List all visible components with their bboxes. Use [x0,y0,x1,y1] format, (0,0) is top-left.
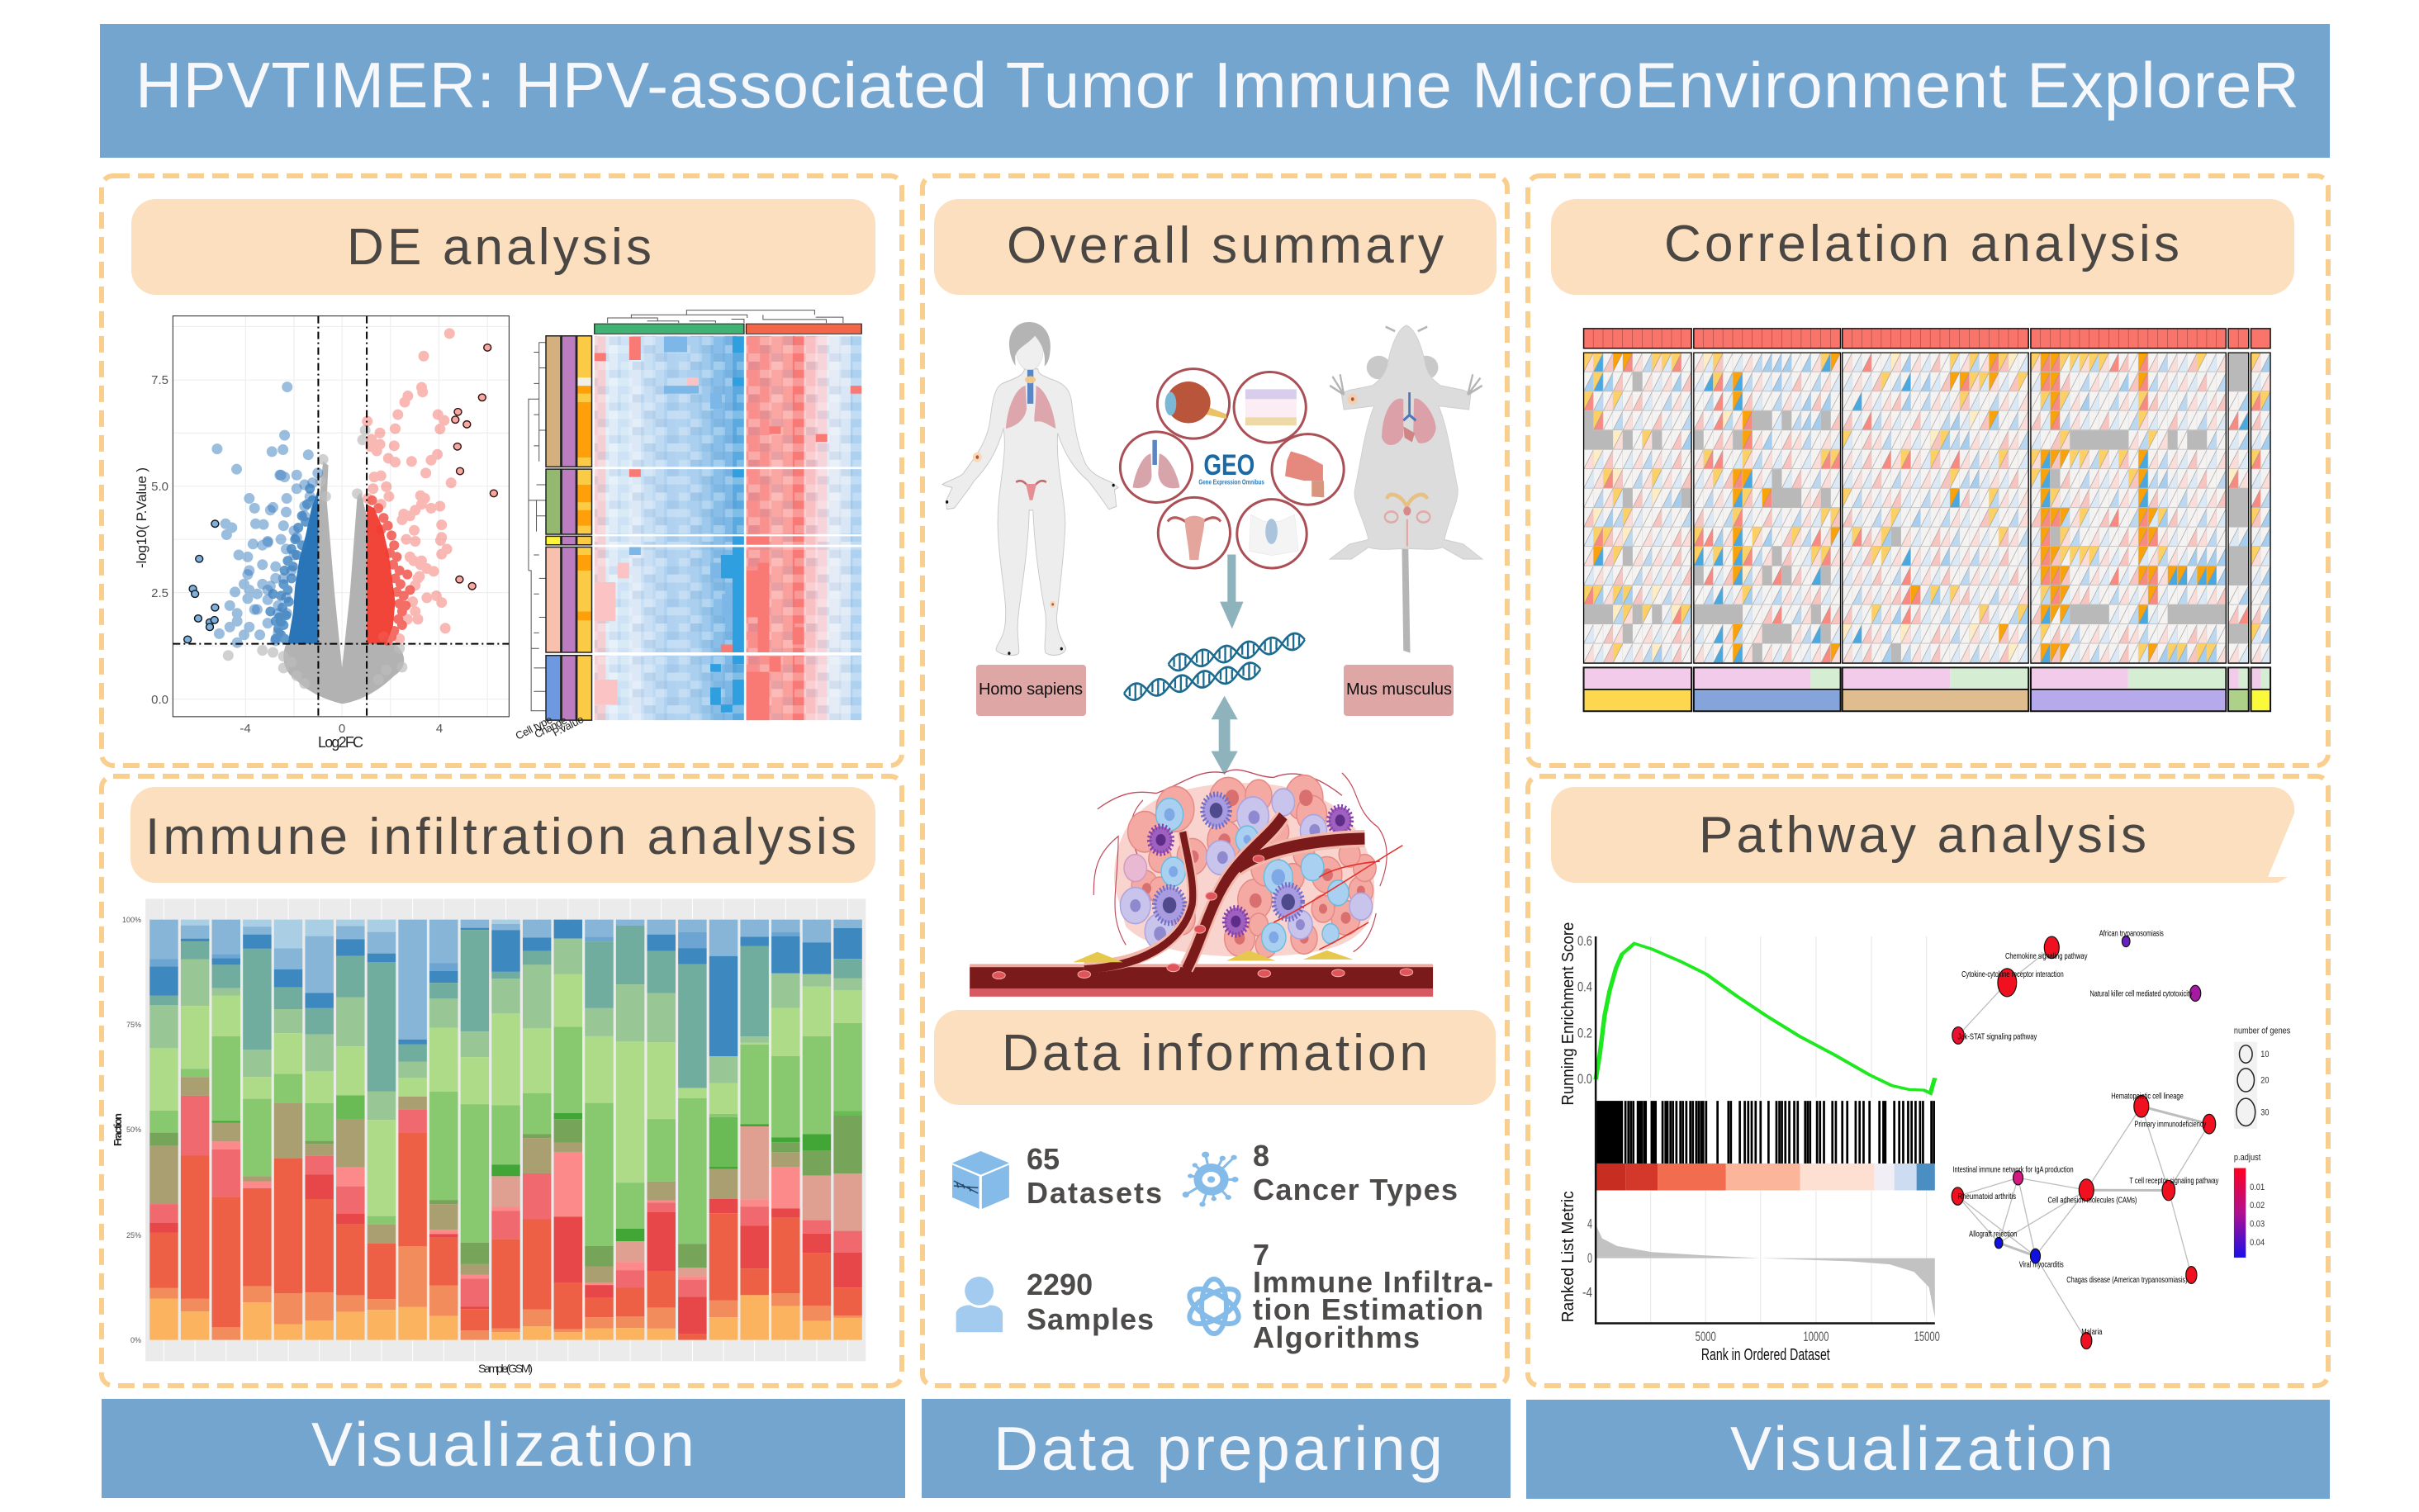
legend: p.adjust: 0.03 [2250,1219,2265,1230]
panel: Immune infiltration analysis [102,776,902,1386]
stat: immune infiltration algorithms: tion Estimation [1253,1292,1483,1326]
legend: p.adjust [2234,1153,2265,1258]
panel: Immune infiltration analysis: Immune infiltration analysis [145,808,856,865]
stat: cancer types: Cancer Types [1253,1173,1458,1206]
GEO logo: Gene Expression Omnibus [1198,478,1264,486]
stacked bar chart: 50% [126,1126,141,1134]
stat: samples: Samples [1027,1302,1154,1336]
volcano plot: 2.5 [151,586,168,600]
panel: Correlation analysis: Correlation analysis [1664,216,2179,273]
block 3 [1843,353,2028,663]
panel: Overall summary and Data information: Overall summary [1007,217,1444,274]
GSEA plot: 5000 [1696,1329,1716,1344]
pathway network: Chagas disease (American trypanosomiasis) [2066,1275,2188,1284]
pathway network: Jak-STAT signaling pathway [1957,1031,2037,1041]
panel: Overall summary and Data information [923,176,1507,1386]
legend: p.adjust: 0.04 [2250,1237,2265,1248]
stacked bar chart: 75% [126,1021,141,1029]
GEO logo: GEO [1203,449,1255,481]
legend: number of genes: 30 [2260,1107,2269,1117]
block 2 [1694,353,1841,663]
stacked bar chart: 25% [126,1231,141,1239]
heatmap: Change [533,713,569,741]
section bar: Data preparing [922,1399,1511,1498]
top annotation [1584,329,2270,348]
stat: datasets: Datasets [1027,1176,1162,1210]
block 1 [1584,353,1691,663]
icon: mouse figure [1330,325,1482,653]
legend: number of genes: 10 [2260,1049,2269,1059]
label: Homo sapiens [976,665,1086,716]
stacked bar chart: Fraction [111,1113,124,1146]
label: Mus musculus: Mus musculus [1346,680,1452,699]
pathway network: Cytokine-cytokine receptor interaction [1961,969,2064,979]
label: Mus musculus [1344,665,1454,716]
legend: number of genes: 20 [2260,1075,2269,1086]
legend: p.adjust: 0.01 [2250,1182,2265,1192]
pathway network: Viral myocarditis [2019,1259,2064,1269]
pathway network: Rheumatoid arthritis [1957,1192,2016,1201]
block 5 [2228,353,2249,663]
triangle correlation heatmap [1584,329,2270,711]
heatmap: P.value [551,713,586,739]
pathway network: Malaria [2081,1326,2103,1336]
GSEA plot: 0.4 [1577,979,1592,994]
pathway network [1952,928,2290,1349]
stacked bar chart [111,898,866,1375]
stacked bar chart: 0% [130,1336,141,1344]
label: Homo sapiens: Homo sapiens [979,680,1083,699]
volcano plot: 0 [339,722,345,736]
legend: number of genes [2234,1026,2290,1129]
arrow: down to DNA [1220,555,1244,629]
GSEA plot: 10000 [1803,1329,1829,1344]
section bar: Visualization left: Visualization [311,1410,695,1479]
stat: immune infiltration algorithms: Algorithms [1253,1320,1420,1354]
pathway network: Cell adhesion molecules (CAMs) [2048,1195,2137,1205]
panel: Pathway analysis [1528,776,2328,1386]
stat: datasets: 65 [1027,1142,1060,1176]
section bar: Data preparing: Data preparing [994,1414,1443,1483]
volcano plot: 0.0 [151,693,168,707]
GSEA plot: -4 [1582,1285,1592,1300]
pathway network: Hematopoietic cell lineage [2111,1091,2184,1101]
stat: cancer types: 8 [1253,1139,1269,1173]
icon: organ circles [1120,369,1344,568]
volcano plot: -log10( P.Value ) [134,467,149,568]
pathway network: Primary immunodeficiency [2134,1119,2206,1129]
GSEA plot: Ranked List Metric [1558,1191,1577,1322]
pathway network: African trypanosomiasis [2099,928,2164,938]
title banner: HPVTIMER: HPV-associated Tumor Immune MicroEnvironment ExploreR [135,49,2299,121]
stat: immune infiltration algorithms: Immune Infiltra- [1253,1265,1493,1299]
title banner [100,24,2330,158]
stat: datasets [952,1142,1162,1210]
heatmap [514,310,861,742]
GSEA plot: 0.6 [1577,933,1592,949]
pathway network: Natural killer cell mediated cytotoxicity [2089,988,2193,998]
data source illustration [942,322,1482,997]
panel: Pathway analysis: Pathway analysis [1699,807,2146,864]
pathway network: Intestinal immune network for IgA production [1952,1164,2074,1174]
stat: immune infiltration algorithms [1184,1238,1493,1354]
arrow: bidirectional [1212,696,1238,775]
volcano plot: 4 [436,722,443,736]
volcano plot: 7.5 [151,373,168,387]
panel: DE analysis: DE analysis [347,219,652,276]
section bar: Visualization right: Visualization [1730,1414,2113,1483]
stacked bar chart: 100% [122,916,141,924]
panel: Pathway analysis: 15000 [1914,1329,1940,1344]
section bar: Visualization left [102,1399,905,1498]
panel: DE analysis [102,176,902,765]
stat: cancer types [1183,1139,1458,1206]
volcano plot: 5.0 [151,480,168,494]
bottom annotations [1584,667,2270,711]
pathway network: Allograft rejection [1969,1229,2017,1239]
tumor microenvironment illustration [970,770,1433,997]
stat: immune infiltration algorithms: 7 [1253,1238,1269,1272]
block 6 [2251,353,2270,663]
stat: samples: 2290 [1027,1268,1093,1301]
GSEA plot [1558,922,1940,1363]
GSEA plot: 4 [1587,1216,1592,1231]
section bar: Visualization right [1526,1400,2330,1499]
legend: p.adjust: p.adjust [2234,1153,2261,1163]
panel: Overall summary and Data information: Data information [1002,1025,1428,1082]
pathway network: Chemokine signaling pathway [2005,950,2087,960]
volcano plot: Log2FC [318,734,363,751]
GSEA plot: Running Enrichment Score [1558,922,1577,1106]
panel: Correlation analysis [1528,176,2328,765]
heatmap: Cell type [514,713,554,742]
volcano plot: -4 [240,722,251,736]
legend: number of genes: number of genes [2234,1026,2290,1036]
legend: p.adjust: 0.02 [2250,1200,2265,1211]
GSEA plot: 0.2 [1577,1026,1592,1040]
GSEA plot: 0 [1587,1250,1592,1266]
icon: DNA helix [1124,633,1305,700]
pathway network: T cell receptor signaling pathway [2129,1175,2218,1185]
GSEA plot: 0.0 [1577,1071,1592,1087]
GSEA plot: Rank in Ordered Dataset [1701,1344,1830,1363]
icon: human figure [942,322,1118,656]
stat: samples [956,1268,1154,1336]
stacked bar chart: Sample(GSM) [478,1362,533,1375]
volcano plot [134,316,509,751]
block 4 [2031,353,2227,663]
